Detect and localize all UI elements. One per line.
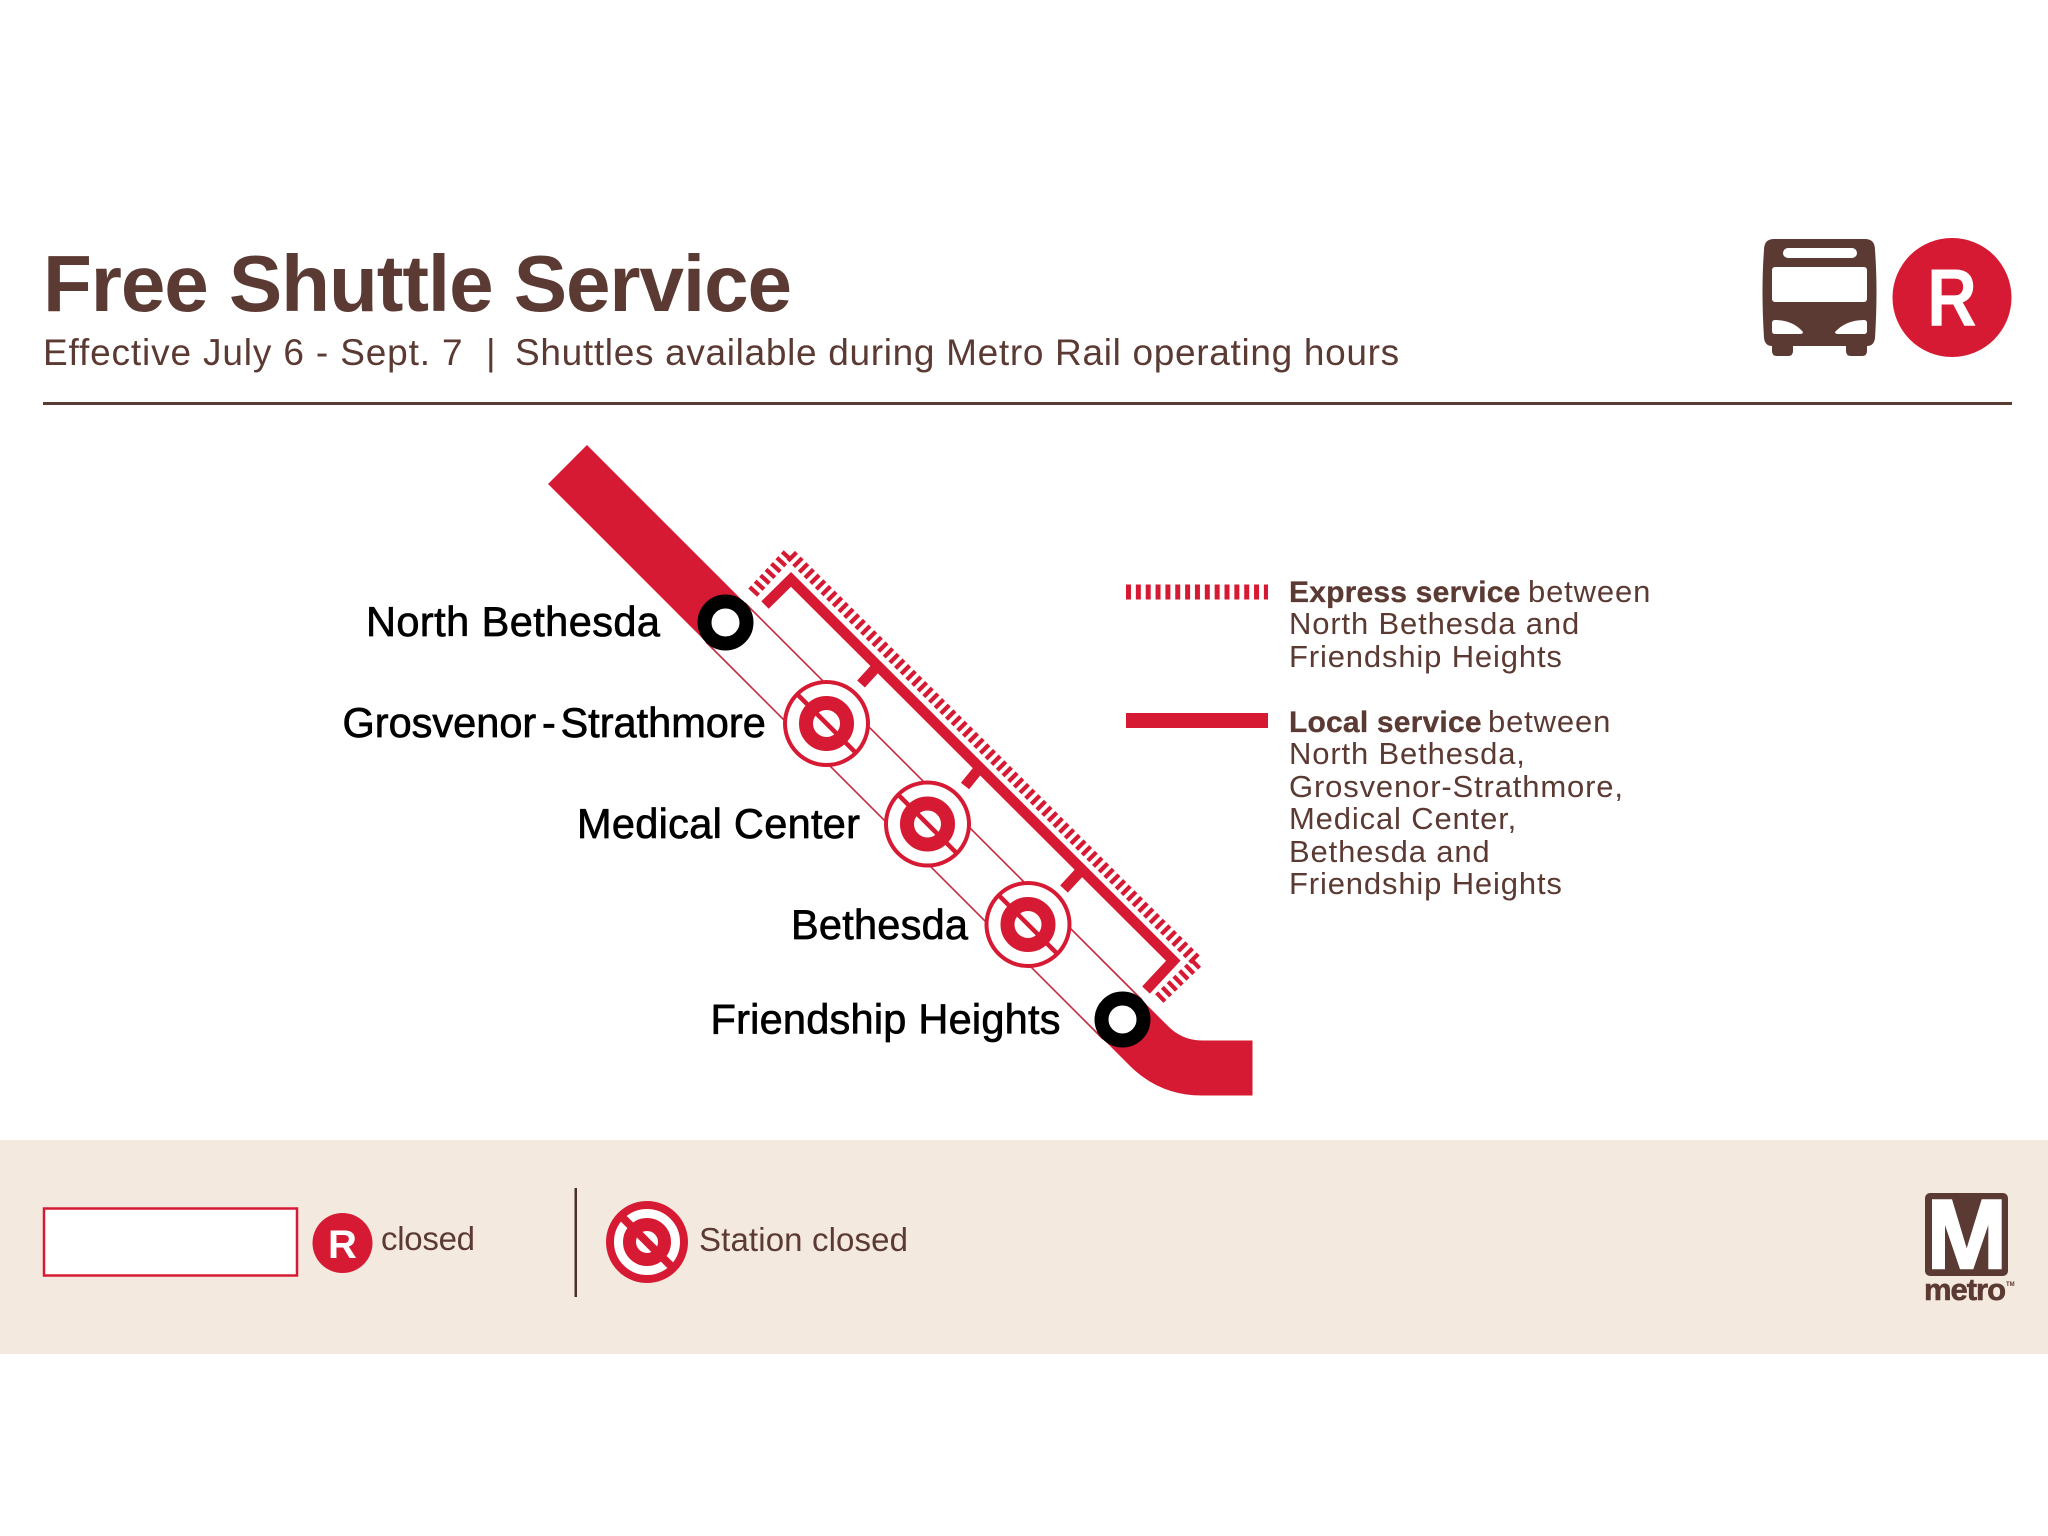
express service bracket [753,553,1198,1001]
station: Grosvenor-Strathmore closed: Strathmore [560,699,766,746]
station: North Bethesda: North Bethesda [366,598,661,645]
icon: red line R badge: R [1927,253,1977,344]
icon: small R badge: R [328,1223,357,1267]
express description: Express service [1289,576,1521,609]
local shuttle line outlines [706,603,1142,1039]
closed label: closed [381,1220,475,1257]
express hatched swatch [1126,584,1268,600]
icon: station closed [610,1205,684,1279]
station: Friendship Heights: Friendship Heights [710,996,1060,1042]
express description: North Bethesda and [1289,606,1580,641]
icon: small R badge [312,1213,372,1273]
local description: between [1488,704,1611,739]
footer divider [574,1188,577,1297]
legend: local service [1126,704,1633,901]
icon: red line R badge [1892,238,2012,357]
station: Bethesda closed: Bethesda [791,901,969,948]
station: Medical Center closed [577,782,969,866]
local solid swatch [1126,713,1268,728]
route map [342,464,1252,1068]
local description: Medical Center, [1289,801,1517,836]
station: Medical Center closed: Medical Center [577,800,860,847]
station: Grosvenor-Strathmore closed: Grosvenor [342,699,536,746]
express description: between [1528,574,1651,609]
closed line key box [44,1208,297,1276]
header rule [43,402,2012,405]
metro logo: TM [2006,1282,2015,1288]
metro logo [1924,1193,2015,1307]
icon: bus [1762,239,1876,356]
local description: Bethesda and [1289,834,1491,869]
title: Free Shuttle Service [43,239,792,328]
footer background [0,1140,2048,1354]
footer panel [0,1140,2048,1354]
station: Bethesda closed [791,883,1070,966]
subtitle: Shuttles available during Metro Rail operating hours [515,332,1400,373]
red line south segment [1122,1020,1252,1068]
metro logo: metro [1924,1272,2006,1307]
station closed label: Station closed [699,1221,908,1258]
local description: North Bethesda, [1289,736,1526,771]
subtitle: Effective July 6 - Sept. 7 [43,332,463,373]
local description: Friendship Heights [1289,866,1563,901]
express description: Friendship Heights [1289,639,1563,674]
header [43,238,2012,405]
local service bracket [765,579,1173,990]
local description: Local service [1289,706,1482,739]
station: Grosvenor-Strathmore closed: - [542,699,556,746]
subtitle: | [486,332,496,373]
legend: express service [1126,574,1661,674]
red line north segment [568,464,726,622]
local description: Grosvenor-Strathmore, [1289,769,1624,804]
station: Grosvenor-Strathmore closed [342,682,868,765]
